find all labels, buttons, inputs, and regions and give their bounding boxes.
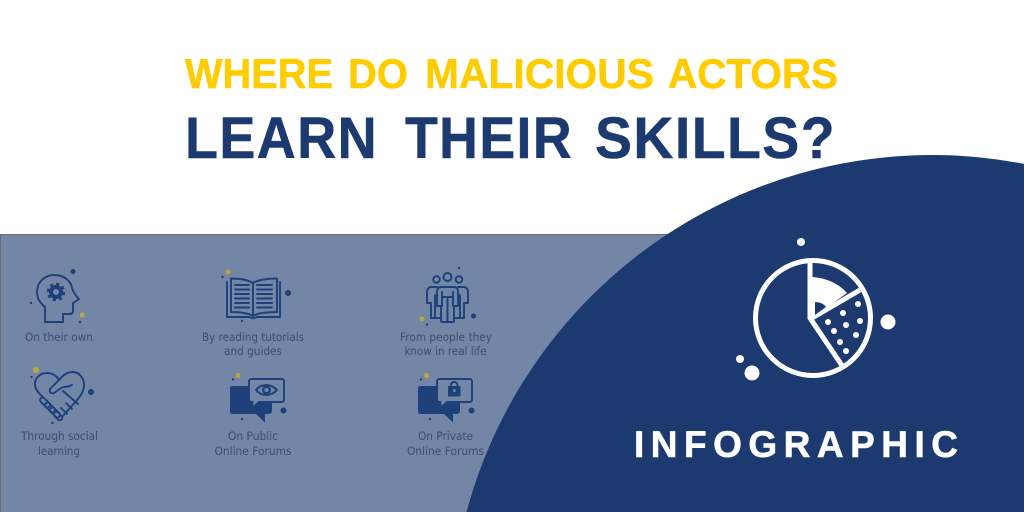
title line 1: ACTORS [668, 50, 838, 97]
title line 1: WHERE [185, 50, 333, 97]
label: By reading tutorials [202, 330, 304, 344]
icon: speech bubbles with lock [418, 373, 474, 422]
icon: pie chart [736, 238, 896, 380]
title line 2: THEIR [405, 106, 573, 171]
title [185, 50, 838, 171]
label: Through social [20, 429, 98, 443]
item: public online forums: Online Forums [214, 444, 292, 458]
title line 2: LEARN [185, 106, 378, 171]
item: social learning [20, 367, 98, 458]
item: people in real life [400, 267, 492, 358]
title line 1 [185, 50, 838, 97]
label: From people they [400, 330, 492, 344]
icon: head with gear [30, 269, 84, 323]
item: tutorials and guides: and guides [224, 344, 282, 358]
item: people in real life: know in real life [404, 344, 486, 358]
title line 2: SKILLS? [595, 106, 836, 171]
large navy circle [466, 155, 1024, 512]
title line 1: MALICIOUS [425, 50, 654, 97]
icon: speech bubbles with eye [230, 373, 286, 422]
icon: handshake heart [30, 367, 94, 424]
panel: faded infographic preview [0, 234, 760, 512]
label: On Public [228, 429, 278, 443]
label: On Private [418, 429, 473, 443]
item: private online forums: Online Forums [407, 444, 484, 458]
label: On their own [25, 330, 93, 344]
icon: open book [221, 270, 291, 322]
item: tutorials and guides [202, 270, 304, 358]
item: private online forums [407, 373, 484, 458]
item: on their own [25, 269, 93, 344]
title line 1: DO [348, 50, 408, 97]
icon: group of people [420, 267, 476, 326]
item: public online forums [214, 373, 292, 458]
title line 2 [185, 106, 836, 171]
infographic label: INFOGRAPHIC [634, 424, 958, 465]
item: social learning: learning [38, 444, 80, 458]
